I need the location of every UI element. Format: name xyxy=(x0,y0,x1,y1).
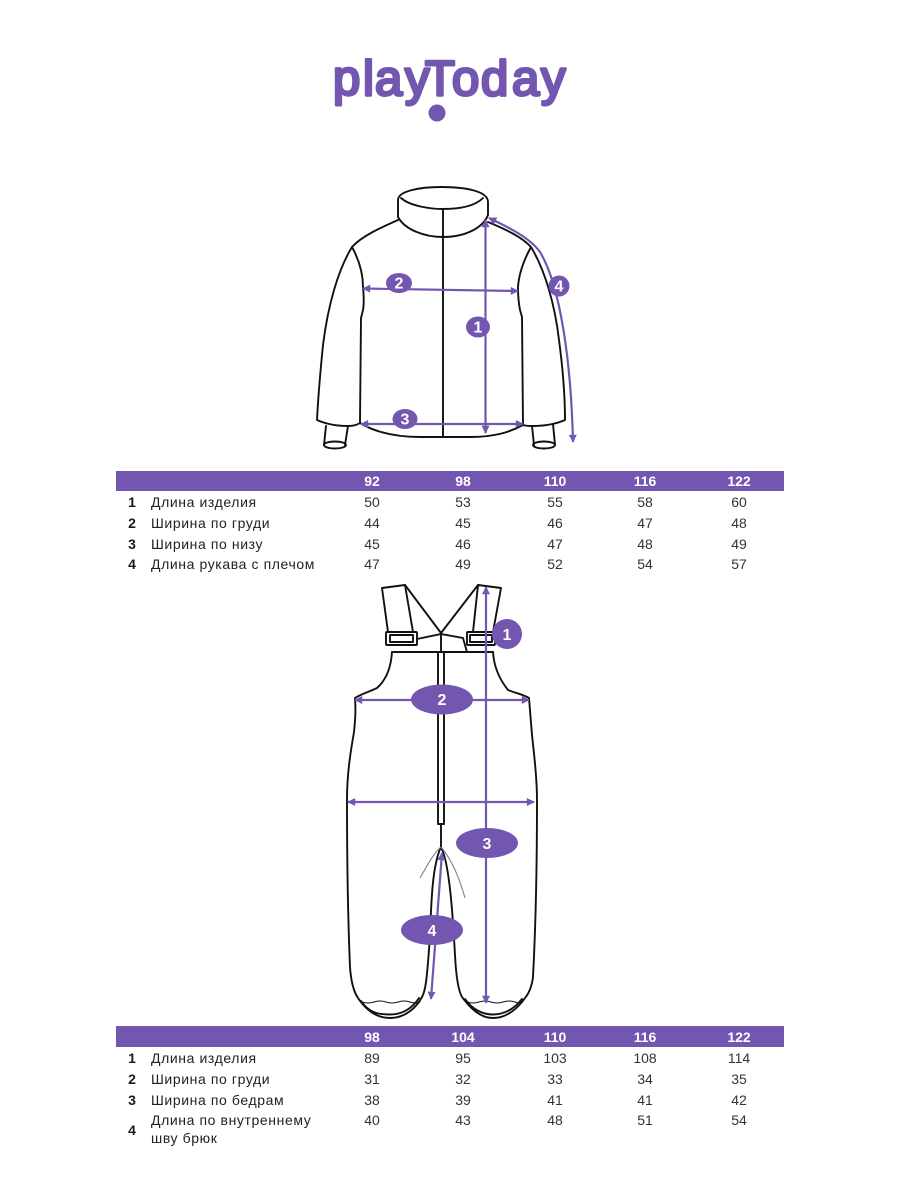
badge 3: 3 xyxy=(401,412,410,428)
row 1: 103 xyxy=(543,1050,567,1066)
row 2 xyxy=(128,515,747,531)
row 4: 40 xyxy=(364,1112,380,1128)
row 2: 48 xyxy=(731,515,747,531)
row 3: 41 xyxy=(637,1092,653,1108)
badge 4 xyxy=(401,915,463,945)
badge 1 xyxy=(492,619,522,649)
row 3: 3 xyxy=(128,536,136,552)
row 4 xyxy=(128,556,747,572)
table header: 110 xyxy=(544,1029,567,1045)
row 3: 39 xyxy=(455,1092,471,1108)
badge 2 xyxy=(411,684,473,714)
badge 4 xyxy=(548,276,570,296)
row 3: 46 xyxy=(455,536,471,552)
badge 2: 2 xyxy=(395,276,404,292)
row 3: 42 xyxy=(731,1092,747,1108)
row 2: 2 xyxy=(128,1071,136,1087)
table header: 98 xyxy=(364,1029,380,1045)
badge 3: 3 xyxy=(483,836,492,853)
row 1: Длина изделия xyxy=(151,494,257,510)
row 2: 44 xyxy=(364,515,380,531)
row 2: 2 xyxy=(128,515,136,531)
row 4 xyxy=(128,1112,747,1146)
row 1: 60 xyxy=(731,494,747,510)
row 1: 55 xyxy=(547,494,563,510)
jacket diagram xyxy=(317,187,573,448)
row 4: 54 xyxy=(637,556,653,572)
row 2: 31 xyxy=(364,1071,380,1087)
row 1: Длина изделия xyxy=(151,1050,257,1066)
row 3 xyxy=(128,1092,747,1108)
row 3 xyxy=(128,536,747,552)
row 1: 95 xyxy=(455,1050,471,1066)
badge 1 xyxy=(466,316,490,338)
row 4: 54 xyxy=(731,1112,747,1128)
badge 1: 1 xyxy=(474,320,483,336)
row 1: 58 xyxy=(637,494,653,510)
row 3: Ширина по бедрам xyxy=(151,1092,284,1108)
overalls diagram xyxy=(347,585,537,1018)
measurement arrows xyxy=(348,587,534,1003)
overalls outline xyxy=(347,585,537,1018)
row 3: 38 xyxy=(364,1092,380,1108)
row 1: 1 xyxy=(128,494,136,510)
row 4: 43 xyxy=(455,1112,471,1128)
badge 2 xyxy=(386,273,412,293)
row 4: 4 xyxy=(128,1122,136,1138)
badge 4: 4 xyxy=(555,278,564,296)
badge 2: 2 xyxy=(438,692,447,709)
row 3: 47 xyxy=(547,536,563,552)
fold lines xyxy=(420,847,465,898)
row 2: Ширина по груди xyxy=(151,1071,270,1087)
table header: 110 xyxy=(544,473,567,489)
row 1: 89 xyxy=(364,1050,380,1066)
row 2: 45 xyxy=(455,515,471,531)
row 2 xyxy=(128,1071,747,1087)
row 4: Длина по внутреннему xyxy=(151,1112,311,1128)
row 4: 47 xyxy=(364,556,380,572)
table header xyxy=(116,471,784,491)
row 2: 35 xyxy=(731,1071,747,1087)
row 3: 3 xyxy=(128,1092,136,1108)
table header: 92 xyxy=(364,473,380,489)
row 2: 47 xyxy=(637,515,653,531)
badge 1: 1 xyxy=(503,627,512,644)
row 1: 1 xyxy=(128,1050,136,1066)
row 3: Ширина по низу xyxy=(151,536,263,552)
row 4: Длина рукава с плечом xyxy=(151,556,315,572)
row 4: 57 xyxy=(731,556,747,572)
row 1: 50 xyxy=(364,494,380,510)
measurement arrows xyxy=(361,218,573,442)
table header: 116 xyxy=(634,1029,657,1045)
badge 4: 4 xyxy=(428,923,437,940)
table header: 104 xyxy=(451,1029,475,1045)
row 3: 49 xyxy=(731,536,747,552)
row 4: 4 xyxy=(128,556,136,572)
row 3: 41 xyxy=(547,1092,563,1108)
row 1 xyxy=(128,1050,750,1066)
table header: 98 xyxy=(455,473,471,489)
row 1: 53 xyxy=(455,494,471,510)
row 2: 34 xyxy=(637,1071,653,1087)
row 3: 48 xyxy=(637,536,653,552)
row 4: 51 xyxy=(637,1112,653,1128)
row 2: Ширина по груди xyxy=(151,515,270,531)
table header xyxy=(116,1026,784,1047)
row 4: 52 xyxy=(547,556,563,572)
row 4: 48 xyxy=(547,1112,563,1128)
table header: 122 xyxy=(727,473,751,489)
jacket outline xyxy=(317,187,565,448)
overalls size table xyxy=(116,1026,784,1146)
row 1: 114 xyxy=(728,1050,750,1066)
badge 3 xyxy=(392,409,418,429)
row 4: 49 xyxy=(455,556,471,572)
row 1: 108 xyxy=(633,1050,657,1066)
row 4: шву брюк xyxy=(151,1130,218,1146)
row 3: 45 xyxy=(364,536,380,552)
badge 3 xyxy=(456,828,518,858)
table header: 116 xyxy=(634,473,657,489)
table header: 122 xyxy=(727,1029,751,1045)
row 2: 46 xyxy=(547,515,563,531)
row 2: 33 xyxy=(547,1071,563,1087)
jacket size table xyxy=(116,471,784,572)
row 1 xyxy=(128,494,747,510)
row 2: 32 xyxy=(455,1071,471,1087)
logo: playToday: playToday xyxy=(333,52,566,106)
